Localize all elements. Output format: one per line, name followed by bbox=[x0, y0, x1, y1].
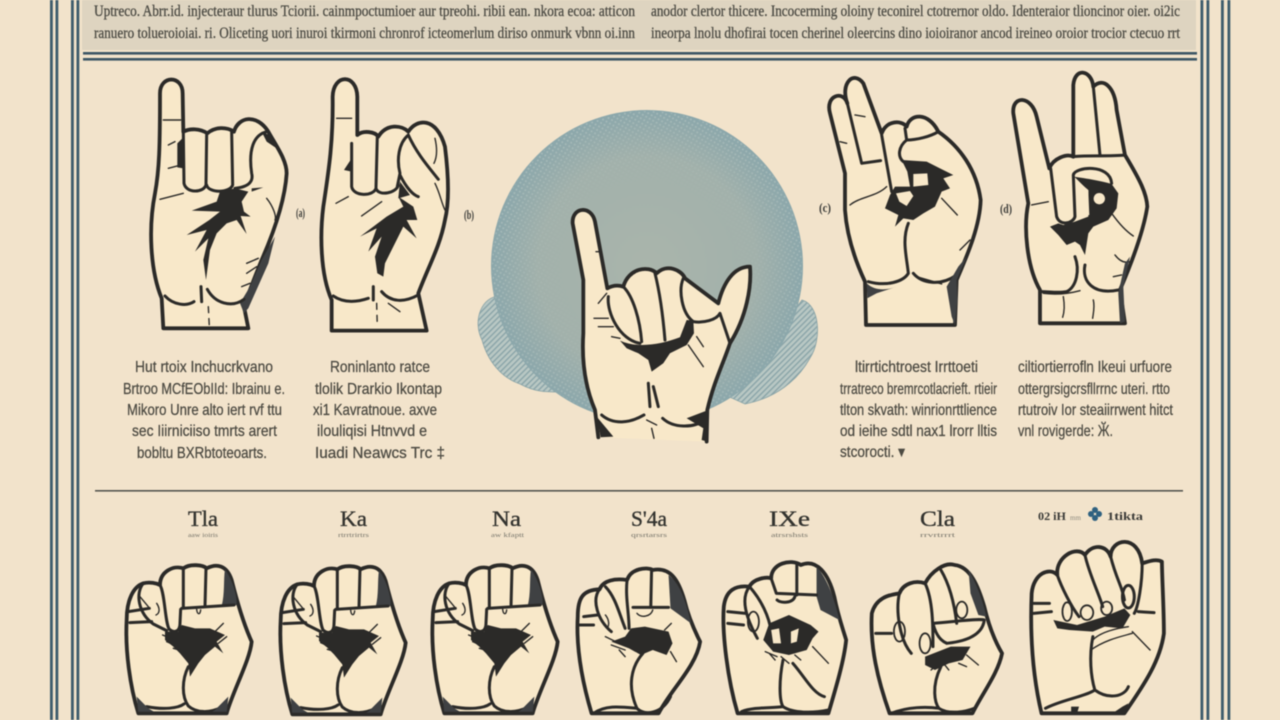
paragraph block 4: ottergrsigcrsfllrrnc uteri. rtto bbox=[1018, 381, 1170, 398]
paragraph block 1: Hut rtoix Inchucrkvano bbox=[135, 359, 273, 376]
top text band: Uptreco. Abrr.id. injecteraur tlurus Tciorii. cainmpoctumioer aur tpreohi. ribii ean. nkora ecoa: atticon bbox=[94, 3, 635, 20]
fist column 3: aw kfaptt bbox=[491, 532, 524, 539]
hand illustration 3: two fingers raised bbox=[829, 78, 981, 325]
fist column 3: Na bbox=[492, 506, 521, 531]
right ear tuft bbox=[725, 300, 818, 404]
paragraph block 1: sec Iiirniciiso tmrts arert bbox=[132, 423, 277, 440]
paragraph block 3: trratreco bremrcotlacrieft. rtieir bbox=[840, 381, 997, 398]
paragraph block 2: Roninlanto ratce bbox=[330, 359, 430, 376]
main hand bbox=[573, 210, 750, 442]
paragraph block 2: ilouliqisi Htnvvd e bbox=[317, 423, 427, 440]
top text band bbox=[82, 0, 1196, 50]
paragraph block 1 bbox=[123, 359, 285, 462]
hand illustration 2: index raised, thumb over bbox=[321, 79, 448, 331]
left ear tuft bbox=[478, 296, 560, 392]
heading with small emblem bbox=[1038, 507, 1143, 523]
label c: (c) bbox=[819, 200, 831, 215]
heading with small emblem: 02 iH bbox=[1038, 509, 1067, 523]
paragraph block 2: Iuadi Neawcs Trc ‡ bbox=[315, 445, 445, 462]
fist column 2: Ka bbox=[340, 506, 367, 531]
label a: (a) bbox=[296, 205, 305, 220]
top text band: ranuero tolueroioiai. ri. Oliceting uori inuroi tkirmoni chronrof icteomerlum diriso onmurk vbnn oi.inn bbox=[94, 25, 635, 42]
double rule under top band bbox=[83, 52, 1197, 61]
hand illustration 4: index and two fingers raised bbox=[1013, 73, 1147, 323]
paragraph block 1: Brtroo MCfEObIId: Ibrainu e. bbox=[123, 381, 285, 398]
paragraph block 3: tlton skvath: winrionrttlience bbox=[840, 402, 997, 419]
fist column 6: rrvrtrrrt bbox=[920, 533, 956, 539]
paragraph block 2: xi1 Kavratnoue. axve bbox=[313, 402, 437, 419]
fist column 1: Tla bbox=[188, 506, 218, 531]
paragraph block 2: tlolik Drarkio Ikontap bbox=[315, 381, 442, 398]
fist column 4 bbox=[577, 506, 700, 713]
fist column 5: IXe bbox=[769, 506, 810, 531]
hand illustration 1: index raised bbox=[151, 80, 287, 328]
fist column 5: atrsrshsts bbox=[771, 533, 809, 539]
paragraph block 4: ciltiortierrofln Ikeui urfuore bbox=[1018, 359, 1172, 376]
fist column 3 bbox=[432, 506, 558, 713]
paragraph block 1: Mikoro Unre alto iert rvf ttu bbox=[127, 402, 282, 419]
fist column 1: aaw ioiris bbox=[188, 533, 219, 539]
fist column 2: rtrrtrirtrs bbox=[338, 533, 370, 539]
label b: (b) bbox=[464, 207, 474, 222]
paragraph block 4 bbox=[1018, 359, 1173, 440]
fist column 5 bbox=[723, 506, 846, 713]
globe disc bbox=[491, 110, 803, 422]
paragraph block 3 bbox=[840, 359, 997, 461]
fist column 1 bbox=[126, 506, 252, 713]
fist column 7 with heading icon bbox=[1031, 507, 1164, 713]
paragraph block 3: od ieihe sdtl nax1 lrorr lltis bbox=[840, 423, 997, 440]
central figure: globe with hand bbox=[478, 110, 818, 442]
top text band: anodor clertor thicere. Incocerming oloiny teconirel ctotrernor oldo. Identeraior tlioncinor oier. oi2ic bbox=[651, 3, 1180, 20]
open fist hand bbox=[1031, 542, 1164, 713]
paragraph block 2 bbox=[313, 359, 445, 462]
paragraph block 3: stcorocti. ▾ bbox=[840, 444, 905, 461]
fist column 4: qrsrtarsrs bbox=[631, 533, 668, 539]
paragraph block 4: vnl rovigerde: Ӂ. bbox=[1018, 421, 1113, 440]
fist column 6 bbox=[872, 506, 1002, 713]
halftone dots bbox=[492, 111, 802, 421]
paragraph block 3: ltirrtichtroest Irrttoeti bbox=[855, 359, 978, 376]
fist column 6: Cla bbox=[920, 506, 955, 531]
heading with small emblem: 1tikta bbox=[1107, 509, 1143, 523]
paragraph block 4: rtutroiv Ior steaiirrwent hitct bbox=[1018, 402, 1173, 419]
section divider bbox=[95, 490, 1183, 492]
paragraph block 1: bobltu BXRbtoteoarts. bbox=[137, 445, 267, 462]
top text band: ineorpa lnolu dhofirai tocen cherinel oleercins dino ioioiranor ancod ireineo oroior trocior ctecuo rrt bbox=[651, 25, 1180, 42]
heading with small emblem: mm bbox=[1070, 514, 1081, 522]
label d: (d) bbox=[1000, 201, 1012, 216]
fist column 2 bbox=[280, 506, 406, 714]
fist column 4: S'4a bbox=[631, 506, 667, 531]
